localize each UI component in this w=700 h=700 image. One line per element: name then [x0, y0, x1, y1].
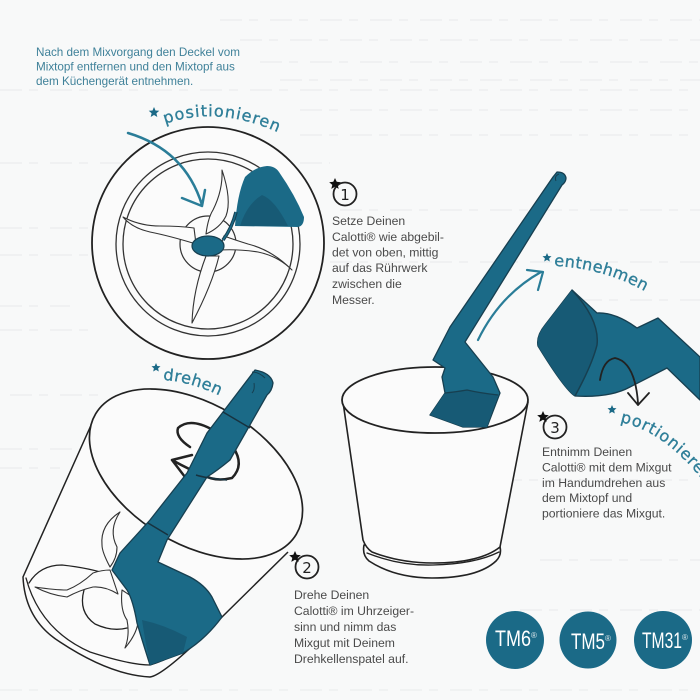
- label: entnehmen: entnehmen: [555, 256, 647, 291]
- step 1 badge: 1: [340, 186, 350, 204]
- badge: TM6: [486, 611, 544, 669]
- badge: TM5: [560, 612, 616, 668]
- arrow: lifting out: [478, 270, 543, 340]
- step 1 text: auf das Rührwerk: [332, 261, 428, 275]
- step 3 badge: [537, 411, 566, 438]
- step 1 text: det von oben, mittig: [332, 246, 438, 260]
- step 1 text: Setze Deinen: [332, 214, 405, 228]
- step 2 badge: [289, 551, 318, 578]
- step 3 text: Calotti® mit dem Mixgut: [542, 460, 672, 474]
- step 1 badge: [329, 178, 356, 206]
- arrow: rotation around handle, back part: [172, 423, 239, 479]
- badge: TM5: ®: [605, 634, 611, 643]
- label: positionieren: positionieren: [164, 104, 280, 132]
- badge: TM31: [634, 611, 692, 669]
- step 2 text: sinn und nimm das: [294, 620, 396, 634]
- arrow: into the bowl: [128, 133, 205, 206]
- label: drehen: drehen: [164, 368, 221, 396]
- step 1 text: Calotti® wie abgebil-: [332, 230, 444, 244]
- badge: TM6: TM6: [495, 626, 531, 651]
- step 2 text: Drehe Deinen: [294, 588, 369, 602]
- illustration: spatula in tilted bowl: [112, 370, 273, 665]
- intro text: Mixtopf entfernen und den Mixtopf aus: [36, 60, 235, 74]
- badge: TM6: ®: [531, 631, 537, 640]
- badge: TM31: TM31: [642, 628, 682, 653]
- step 2 text: Drehkellenspatel auf.: [294, 652, 408, 666]
- step 3 badge: 3: [550, 419, 560, 437]
- step 1 text: zwischen die: [332, 277, 402, 291]
- step 3 text: portioniere das Mixgut.: [542, 506, 665, 520]
- step 2 text: Mixgut mit Deinem: [294, 636, 395, 650]
- illustration: spatula tipping out content: [538, 290, 700, 400]
- illustration: tilted mixing bowl with spatula: [23, 354, 332, 677]
- step 3 text: dem Mixtopf und: [542, 491, 632, 505]
- label: drehen: [152, 363, 221, 396]
- step 3 text: im Handumdrehen aus: [542, 476, 665, 490]
- badge: TM5: TM5: [571, 629, 605, 654]
- illustration: mixing bowl with spatula: [342, 172, 566, 578]
- step 2 badge: 2: [302, 559, 312, 577]
- badge: TM31: ®: [682, 633, 688, 642]
- step 3 text: Entnimm Deinen: [542, 445, 632, 459]
- intro text: Nach dem Mixvorgang den Deckel vom: [36, 46, 240, 59]
- intro text: dem Küchengerät entnehmen.: [36, 75, 193, 88]
- step 1 text: Messer.: [332, 293, 375, 307]
- step 2 text: Calotti® im Uhrzeiger-: [294, 604, 414, 618]
- illustration: top view of mixing bowl with spatula: [92, 127, 324, 359]
- arrow: portioning down: [600, 358, 649, 405]
